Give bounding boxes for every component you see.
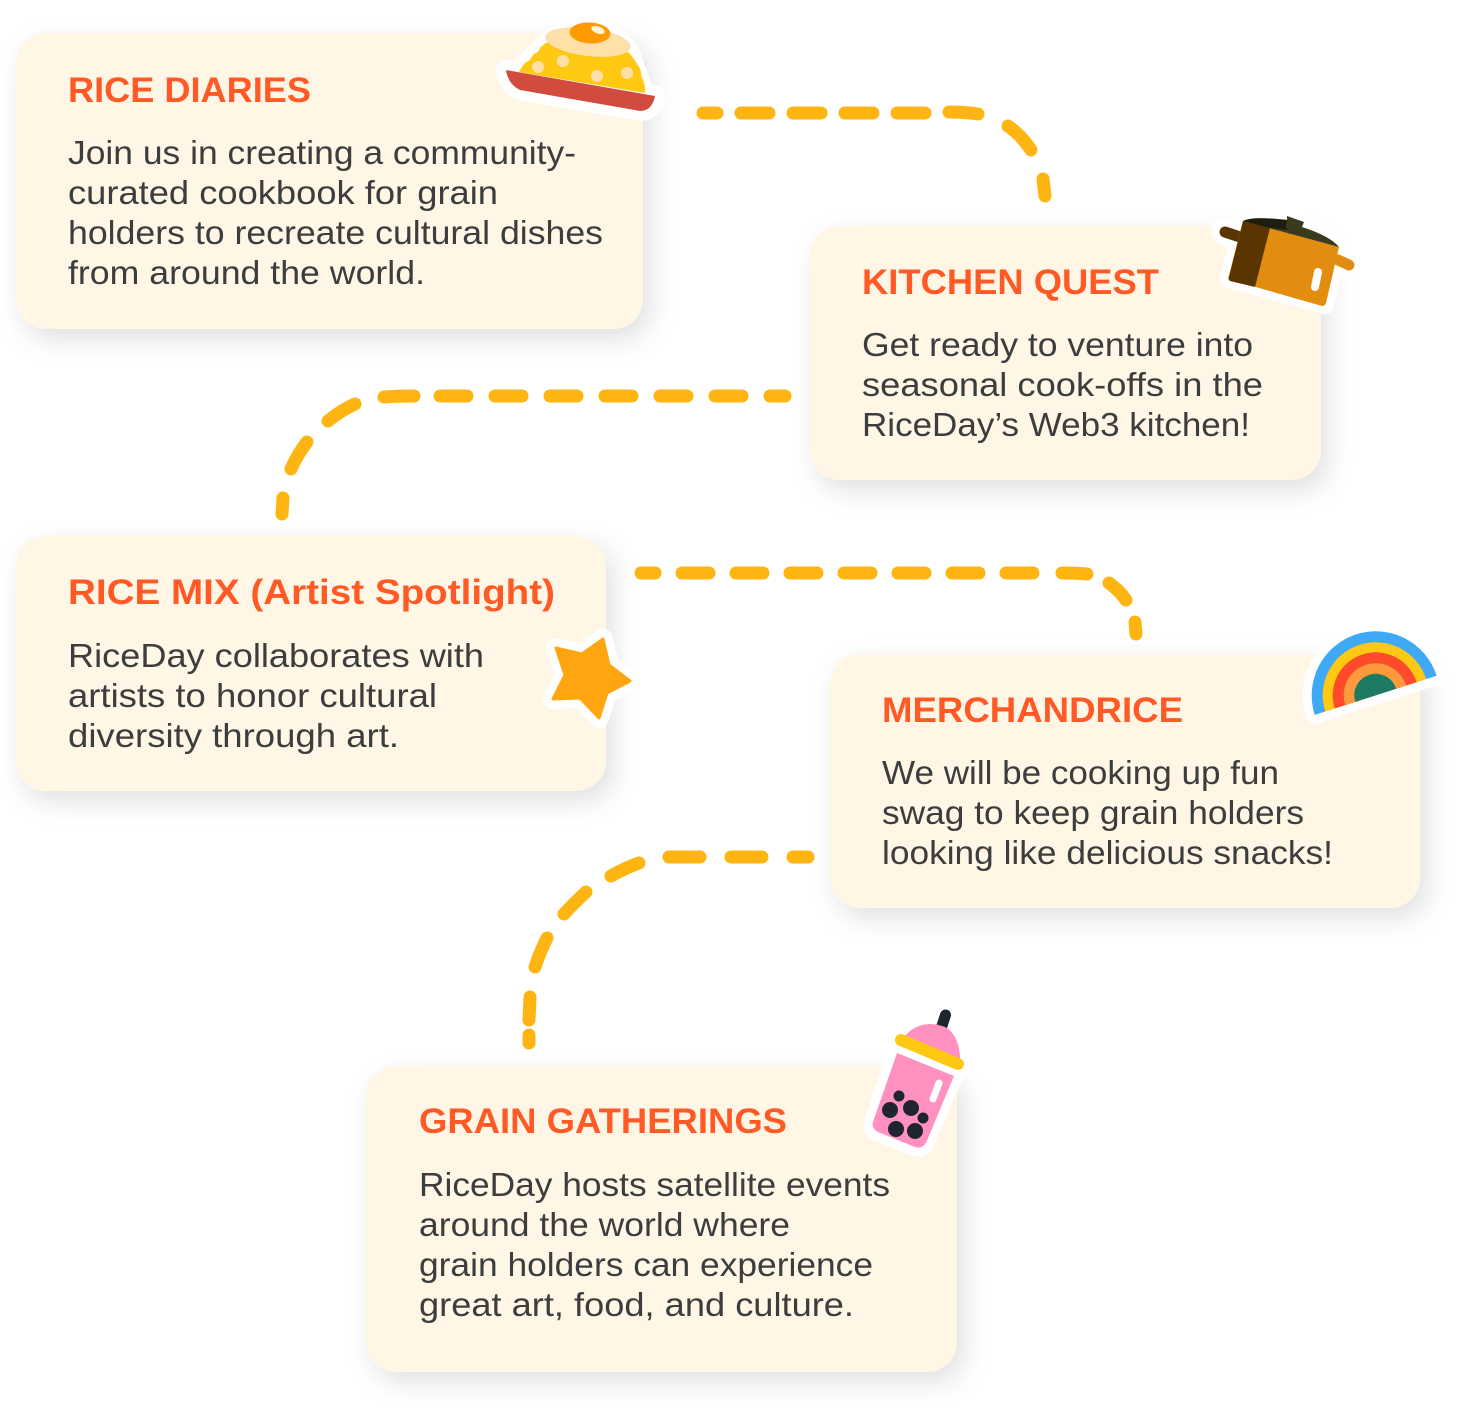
body text: RiceDay’s Web3 kitchen!: [862, 406, 1250, 443]
icon: rice dish: [506, 21, 655, 111]
heading: RICE DIARIES: [68, 71, 311, 110]
dashed connector: Rice Mix to Merchandrice: [641, 573, 1136, 634]
body text: Join us in creating a community-: [68, 134, 576, 171]
body text: diversity through art.: [68, 717, 399, 754]
body text: artists to honor cultural: [68, 677, 437, 714]
body text: looking like delicious snacks!: [882, 834, 1333, 871]
icon: rainbow: [1295, 615, 1437, 715]
body text: around the world where: [419, 1206, 790, 1243]
body text: great art, food, and culture.: [419, 1286, 854, 1323]
body text: from around the world.: [68, 254, 425, 291]
heading: RICE MIX (Artist Spotlight): [68, 573, 555, 612]
heading: KITCHEN QUEST: [862, 263, 1159, 302]
body text: seasonal cook-offs in the: [862, 366, 1263, 403]
body text: RiceDay collaborates with: [68, 637, 484, 674]
body text: grain holders can experience: [419, 1246, 873, 1283]
panel: Rice Diaries: [16, 21, 655, 329]
dashed connector: Rice Diaries to Kitchen Quest: [703, 112, 1045, 196]
body text: [862, 326, 1263, 443]
body text: holders to recreate cultural dishes: [68, 214, 603, 251]
card background: [830, 654, 1420, 908]
body text: We will be cooking up fun: [882, 754, 1279, 791]
panel: Merchandrice: [830, 615, 1437, 908]
card background: [16, 33, 643, 329]
panel: Kitchen Quest: [810, 216, 1349, 480]
panel: Rice Mix (Artist Spotlight): [16, 536, 630, 791]
body text: [68, 637, 484, 754]
heading: GRAIN GATHERINGS: [419, 1102, 787, 1141]
dashed connector: Merchandrice to Grain Gatherings: [529, 857, 808, 1043]
body text: swag to keep grain holders: [882, 794, 1304, 831]
body text: RiceDay hosts satellite events: [419, 1166, 890, 1203]
body text: [68, 134, 603, 291]
card background: [366, 1066, 957, 1372]
icon: cooking pot: [1225, 216, 1349, 306]
icon: bubble tea: [872, 1015, 960, 1148]
dashed connector: Kitchen Quest to Rice Mix: [282, 396, 785, 514]
icon: star: [553, 639, 630, 718]
card background: [810, 226, 1321, 480]
body text: [419, 1166, 890, 1323]
body text: Get ready to venture into: [862, 326, 1253, 363]
panel: Grain Gatherings: [366, 1015, 960, 1372]
body text: curated cookbook for grain: [68, 174, 498, 211]
card background: [16, 536, 606, 791]
body text: [882, 754, 1333, 871]
heading: MERCHANDRICE: [882, 691, 1183, 730]
